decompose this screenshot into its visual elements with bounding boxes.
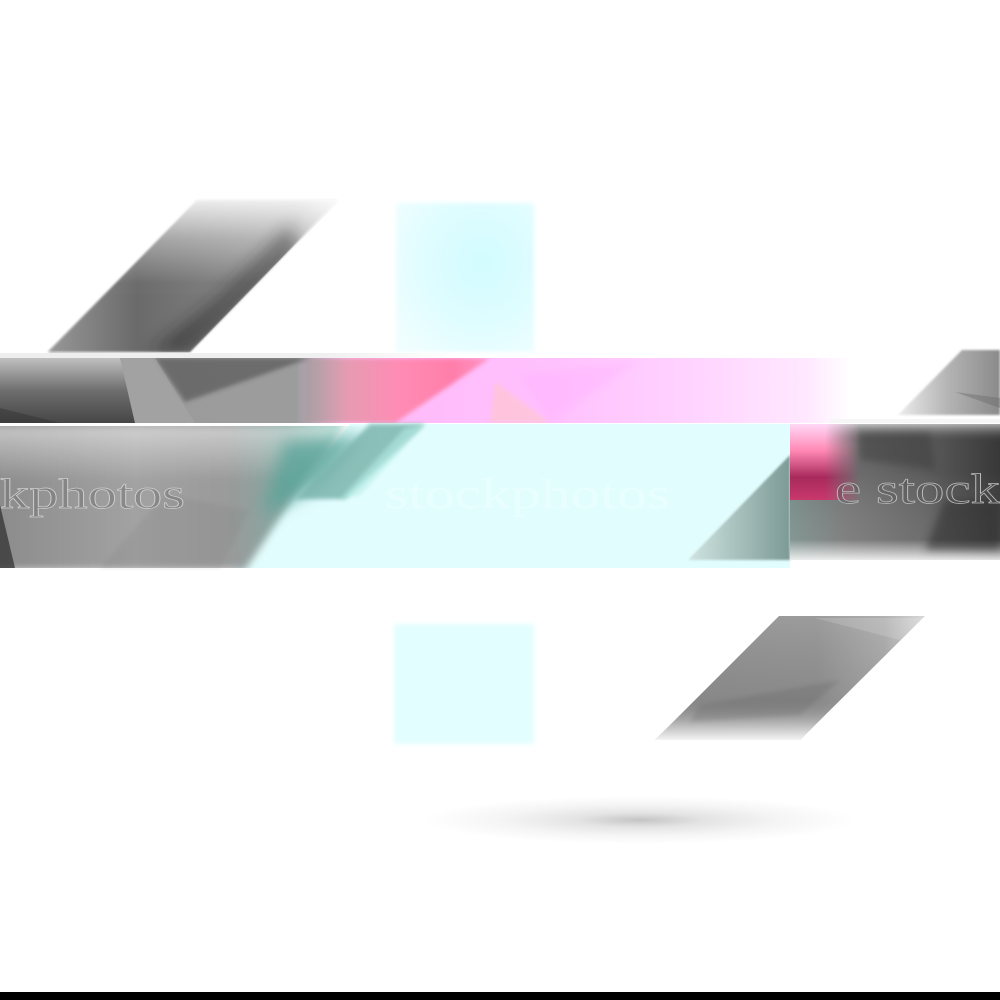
watermark left: kphotos bbox=[0, 472, 185, 518]
bottom black bar bbox=[0, 992, 1000, 1000]
panel: lower band cyan main bbox=[235, 424, 790, 568]
panel: top cyan square bbox=[396, 203, 534, 352]
panel: bottom cyan square bbox=[394, 624, 534, 744]
watermark right: e stock bbox=[835, 467, 1000, 513]
panel: pink overlap on the right bbox=[790, 424, 860, 500]
panel: teal overlap on the left bbox=[262, 424, 425, 515]
floor shadow bbox=[425, 796, 855, 844]
panel: lower band left grey bbox=[0, 420, 345, 570]
panel: top-left grey parallelogram bbox=[48, 200, 338, 352]
panel: bottom-right grey parallelogram bbox=[655, 616, 925, 740]
panel: upper horizontal band bbox=[0, 353, 850, 423]
panel: lower band right dark bbox=[790, 419, 1000, 560]
watermark center: stockphotos bbox=[385, 472, 670, 518]
panel: top-right grey parallelogram bbox=[898, 350, 1000, 415]
